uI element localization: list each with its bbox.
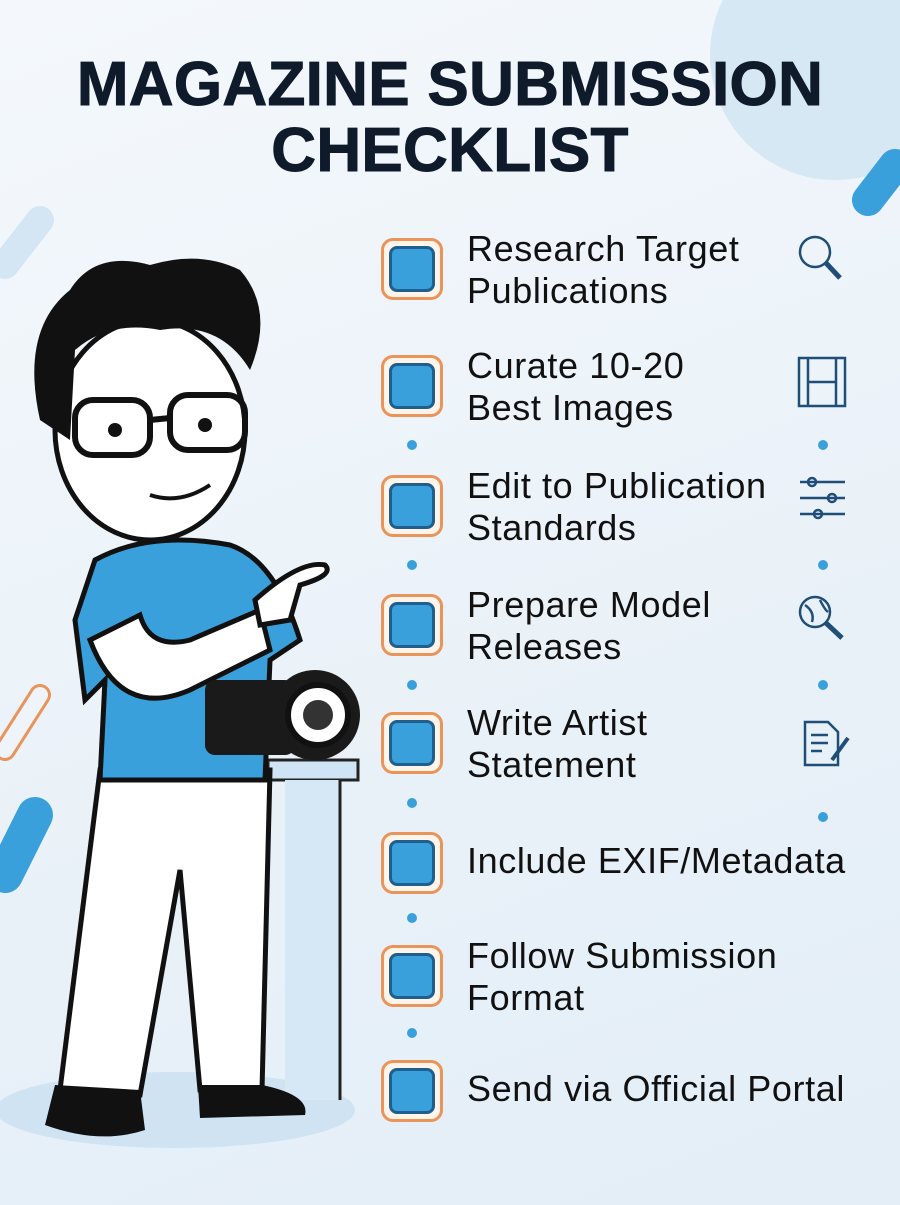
item 2: Best Images — [467, 387, 674, 428]
icon: sliders — [800, 478, 845, 518]
icon: globe search — [800, 597, 842, 638]
item 4: Releases — [467, 626, 622, 667]
arm — [90, 610, 270, 698]
pedestal — [268, 760, 358, 1100]
item 1: Research Target — [467, 228, 739, 269]
icon: magnifier — [800, 237, 840, 278]
icon: film — [799, 358, 845, 406]
item 6: Include EXIF/Metadata — [467, 840, 846, 881]
item 7: Follow Submission — [467, 935, 777, 976]
title: MAGAZINE SUBMISSION — [77, 50, 823, 119]
item 7 — [381, 935, 777, 1018]
item 3: Standards — [467, 507, 637, 548]
camera — [205, 670, 360, 760]
title: CHECKLIST — [271, 116, 629, 185]
item 5: Statement — [467, 744, 636, 785]
item 3 — [381, 465, 767, 548]
item 7: Format — [467, 977, 585, 1018]
item 2 — [381, 345, 684, 428]
item 1: Publications — [467, 270, 668, 311]
pants — [60, 770, 270, 1095]
item 4: Prepare Model — [467, 584, 711, 625]
head — [55, 320, 245, 540]
illustration: photographer character — [0, 258, 360, 1148]
item 6 — [381, 832, 846, 894]
connector dots — [407, 440, 828, 1038]
shoes — [45, 1085, 145, 1136]
item 5 — [381, 702, 648, 785]
item 1 — [381, 228, 739, 311]
item 8: Send via Official Portal — [467, 1068, 845, 1109]
item 3: Edit to Publication — [467, 465, 767, 506]
shirt — [75, 540, 300, 780]
item 2: Curate 10-20 — [467, 345, 684, 386]
title — [77, 50, 823, 185]
icon: document — [805, 722, 848, 765]
item 4 — [381, 584, 711, 667]
item 8 — [381, 1060, 845, 1122]
item 5: Write Artist — [467, 702, 648, 743]
